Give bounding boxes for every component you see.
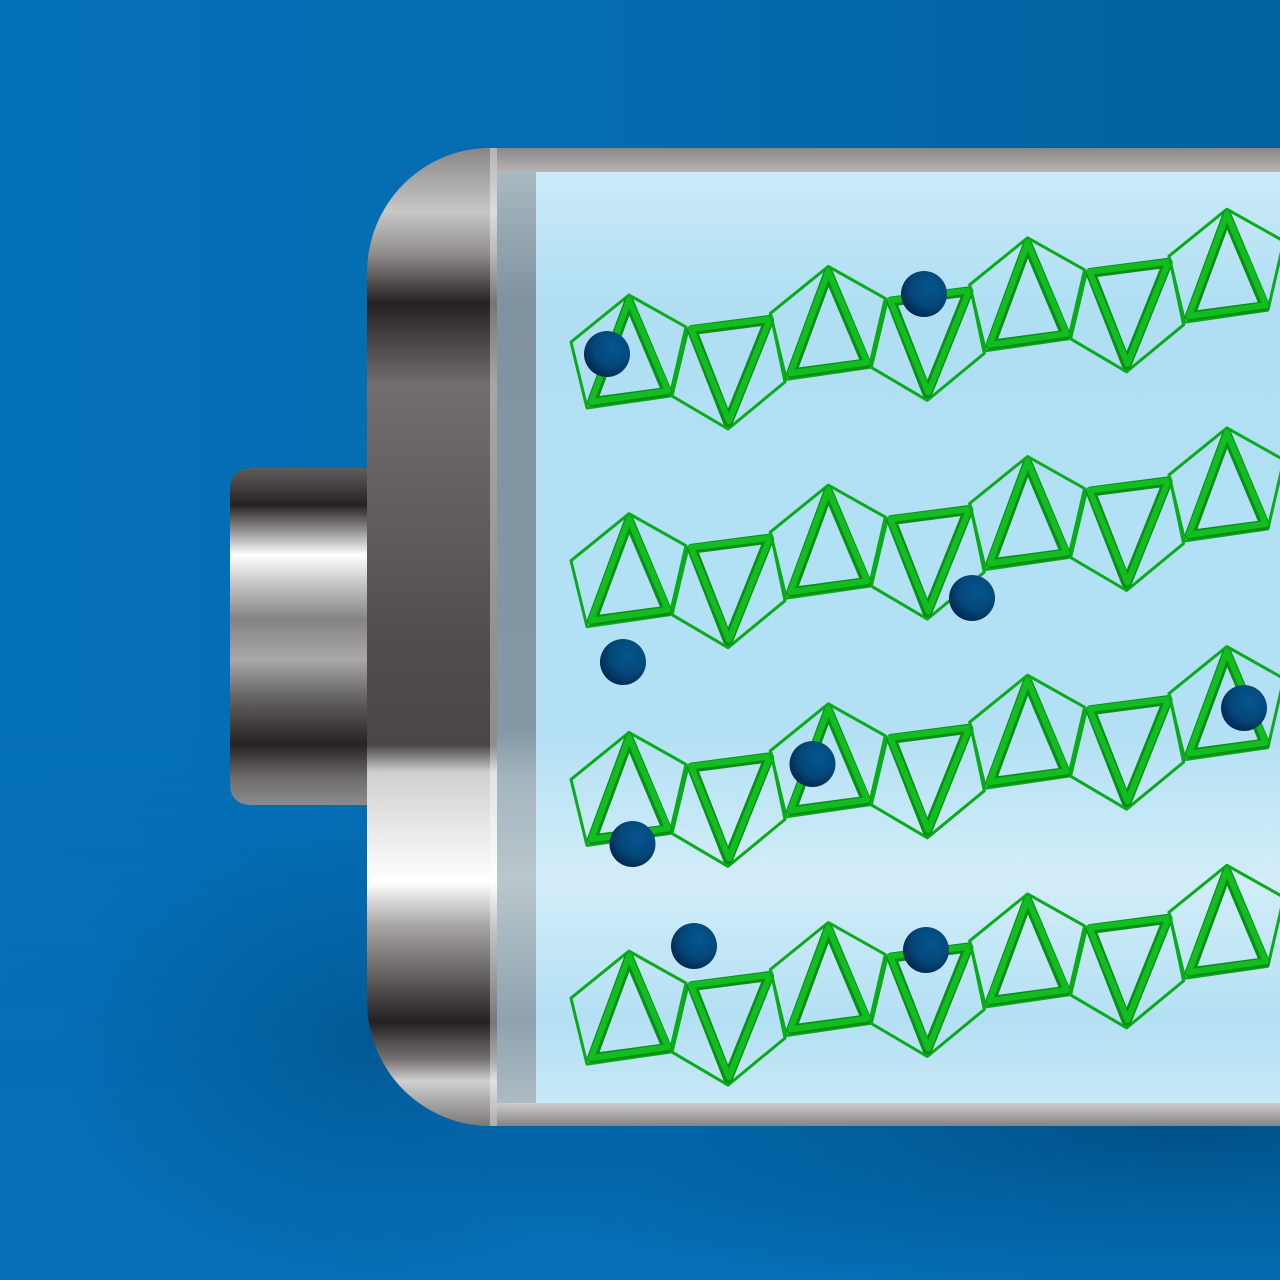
separator	[497, 172, 536, 1103]
bottom casing band	[497, 1103, 1280, 1126]
electrolyte	[536, 172, 1280, 1103]
electrode chain row 1	[571, 209, 1280, 429]
cap edge highlight	[490, 148, 498, 1126]
top casing band	[497, 148, 1280, 172]
electrode chain row 4	[571, 865, 1280, 1085]
electrode chain row 2	[571, 428, 1280, 648]
ions	[584, 271, 1267, 973]
electrode chain row 3	[571, 647, 1280, 866]
battery end cap	[367, 148, 498, 1126]
battery terminal	[230, 468, 367, 805]
